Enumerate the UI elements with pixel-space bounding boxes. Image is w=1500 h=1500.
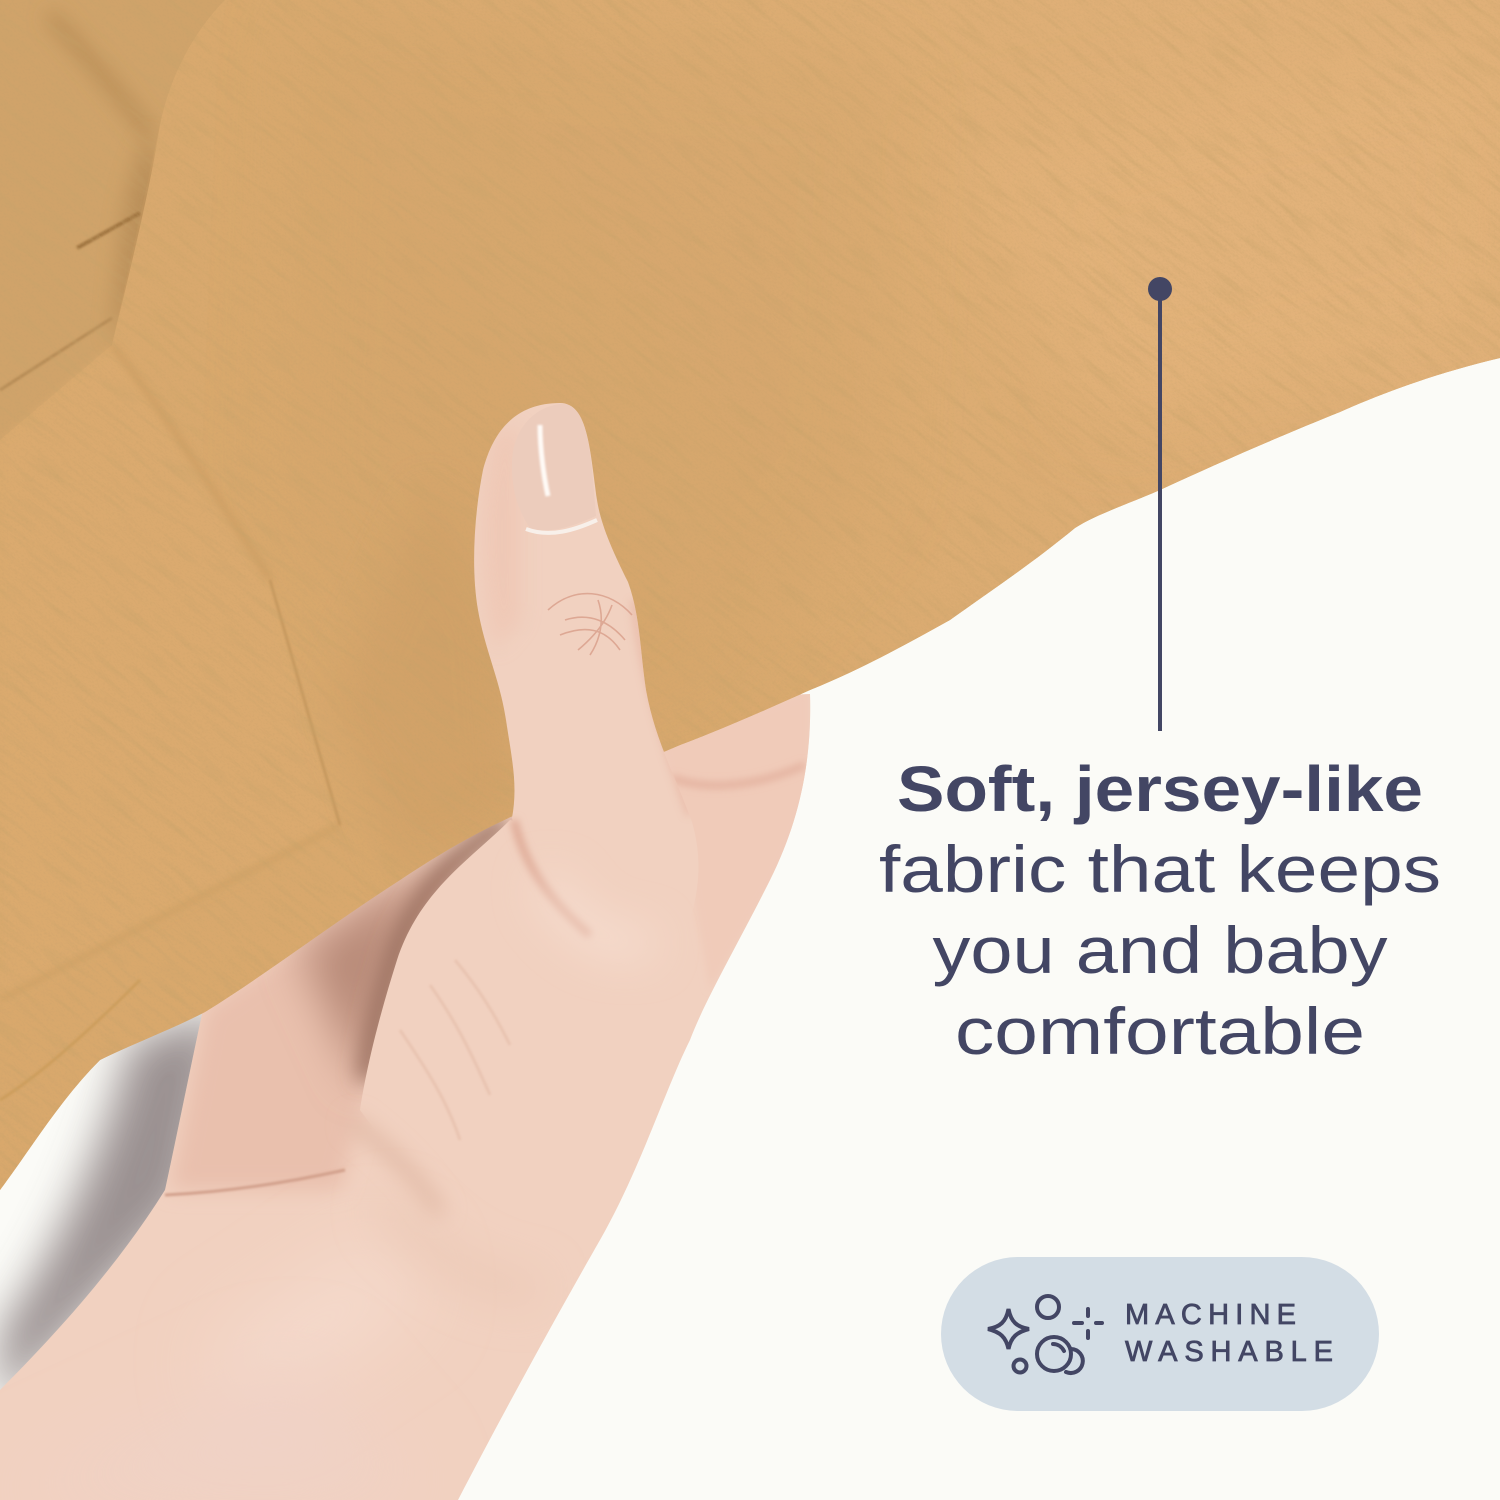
hand shadow on background bbox=[0, 1010, 230, 1410]
palm wrinkles bbox=[400, 960, 510, 1140]
callout text: fabric that keeps bbox=[879, 832, 1441, 906]
callout text: you and baby bbox=[932, 913, 1388, 987]
machine washable badge bbox=[941, 1257, 1379, 1411]
callout pointer line bbox=[1148, 277, 1172, 731]
thumb side shading bbox=[484, 430, 690, 815]
back layer of fabric, top left bbox=[0, 0, 225, 440]
hand palm and wrist bbox=[0, 694, 810, 1500]
thenar mound bbox=[360, 820, 514, 1112]
badge label bbox=[1125, 1299, 1333, 1368]
thumb bbox=[474, 403, 676, 942]
callout text: Soft, jersey-like bbox=[897, 753, 1423, 825]
top layer tonal shading bbox=[0, 4, 1500, 1190]
shadow where fabric meets palm bbox=[288, 844, 459, 1080]
fabric heather streaks bbox=[18, 0, 1500, 828]
callout text: comfortable bbox=[955, 994, 1365, 1068]
thumbnail bbox=[512, 404, 597, 533]
lower left panel seam bbox=[0, 345, 340, 1010]
fingers behind thumb bbox=[734, 694, 810, 950]
badge label: MACHINE bbox=[1125, 1299, 1296, 1331]
badge label: WASHABLE bbox=[1125, 1336, 1333, 1368]
knuckle creases bbox=[548, 594, 632, 655]
thumb base crease bbox=[514, 820, 590, 935]
icon: sparkle and bubbles bbox=[988, 1296, 1102, 1373]
callout text bbox=[879, 753, 1441, 1068]
fabric bbox=[0, 0, 1500, 1190]
palm shading bbox=[172, 944, 364, 1192]
wrist creases bbox=[165, 1170, 345, 1195]
